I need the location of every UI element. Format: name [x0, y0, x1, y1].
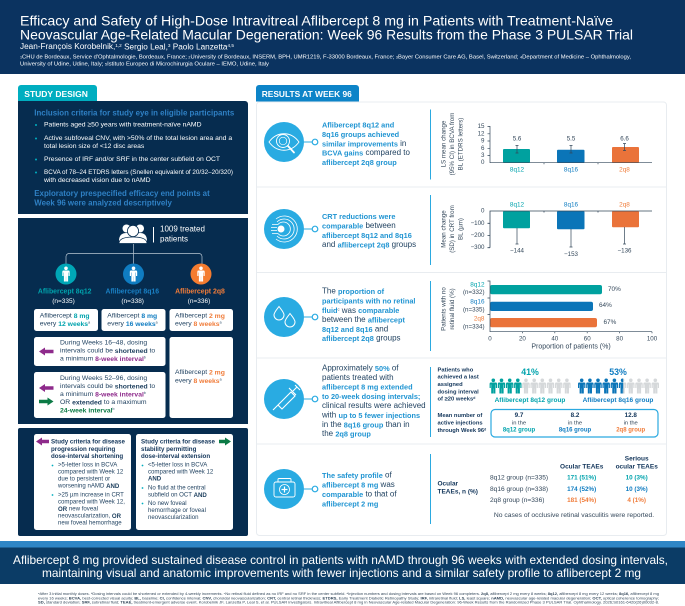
arrow: extend: [39, 398, 54, 406]
label: patients achieving interval: of ≥20 weeks: [438, 397, 473, 403]
table: ocular TEAEs: 171 (51%): [567, 474, 596, 482]
bar chart: BCVA change: 5.5: [567, 136, 576, 142]
table: ocular TEAEs: Serious: [625, 456, 649, 462]
inclusion heading: Inclusion criteria for study eye in eligible participants: [34, 108, 235, 118]
arm: aflibercept 2q8: Aflibercept 2q8: [175, 288, 225, 296]
table: ocular TEAEs: No cases of occlusive retinal vasculitis were reported.: [494, 512, 654, 519]
text: dosing finding: patients treated with: [322, 373, 394, 382]
result row: CRT: [264, 202, 652, 258]
bar chart: CRT change: 8q12: [510, 202, 525, 208]
panel: results: [256, 102, 666, 536]
bar chart: no retinal fluid: (n=335): [463, 306, 484, 314]
arm: aflibercept 8q16: Aflibercept 8q16: [105, 288, 159, 296]
patient count: patients: [160, 234, 188, 244]
table: ocular TEAEs: [490, 456, 658, 519]
arm: aflibercept 2q8: (n=336): [188, 298, 210, 305]
box: weeks 52-96 shortening or extension: During Weeks 52–96, dosing: [60, 375, 147, 382]
dosing box: 2q8: Aflibercept 2 mg: [175, 312, 225, 320]
text: BCVA finding: BCVA gains compared to: [322, 148, 410, 157]
criteria box: extension: <5-letter loss in BCVA: [148, 462, 208, 468]
criteria box: extension: stability permitting: [141, 446, 197, 453]
table: ocular TEAEs: 8q12 group (n=335): [490, 474, 548, 482]
dosing box: 2q8: [170, 309, 233, 331]
label: mean injections: d: [484, 428, 486, 432]
bar chart: BCVA change: 6: [481, 145, 485, 152]
box: 2q8 continued dosing: a: [220, 378, 222, 382]
text: safety finding: comparable to that of: [322, 490, 397, 498]
box: weeks 16-48 shortening: [34, 337, 166, 366]
text: safety finding: The safety profile of: [322, 470, 392, 480]
box: weeks 16-48 shortening: a minimum 8-week interval: [60, 356, 144, 362]
box: weeks 52-96 shortening or extension: a minimum 8-week interval: [60, 391, 144, 398]
arm: aflibercept 2q8: [175, 264, 225, 305]
title: Efficacy and Safety of High-Dose Intravitreal Aflibercept 8 mg in Patients with Treatment-Naïve: [20, 12, 613, 28]
bar chart: BCVA change: 8q12: [510, 166, 525, 174]
footnotes: [38, 592, 659, 605]
criteria box: shortening: dose-interval shortening: [51, 453, 123, 460]
criteria box: extension: AND: [148, 476, 162, 482]
text: fluid finding: The proportion of: [322, 286, 385, 296]
icon: syringe: [264, 379, 318, 419]
bar chart: no retinal fluid: 40: [551, 336, 559, 342]
text: dosing finding: to 20-week dosing intervals;: [322, 392, 420, 400]
text: CRT finding: aflibercept 8q12 and 8q16: [322, 230, 412, 240]
dosing box: 2q8: every 8 weeks: [175, 320, 220, 328]
criteria box: shortening: >25 µm increase in CRT: [58, 492, 124, 498]
row dividers: [430, 110, 432, 524]
conclusion banner: [0, 541, 685, 584]
tab: results at week 96: [256, 85, 359, 102]
bar chart: CRT change: −153: [564, 251, 579, 258]
bar chart: BCVA change: 2q8: [619, 166, 630, 174]
arrow: extension: [219, 438, 231, 446]
bar chart: no retinal fluid: (n=334): [463, 324, 484, 330]
dosing box: 8q16: every 16 weeks: [107, 320, 156, 328]
icon: retina cross-section: [264, 209, 318, 249]
pictogram: 8q12 41 percent: [490, 367, 571, 404]
bar chart: CRT change: −100: [471, 220, 485, 227]
pictogram: 8q16 53 percent: 53%: [609, 367, 627, 377]
affiliations: 1CHU de Bordeaux, Service d'Ophtalmologie, Bordeaux, France; 2University of Bordeaux, INSERM, BPH, UMR1219, F-33000 Bordeaux, France; 3Bayer Consumer Care AG, Basel, Switzerland; 4Department of Medicine – Ophthalmology,: [20, 54, 631, 60]
tab: study design: [18, 85, 97, 101]
icon: fluid drops: [264, 297, 318, 337]
conclusion banner: maintaining visual and anatomic improvements with fewer injections and a similar safety profile to aflibercept 2 mg: [42, 566, 641, 580]
bar chart: BCVA change: 8q16: [564, 166, 579, 174]
bar chart: no retinal fluid: 80: [616, 336, 624, 342]
bar chart: no retinal fluid: 20: [519, 336, 526, 342]
criteria box: extension: Study criteria for disease: [141, 438, 215, 446]
box: weeks 16-48 shortening: b: [144, 356, 146, 360]
table: ocular TEAEs: 174 (52%): [567, 486, 596, 493]
panel: study criteria: [18, 428, 248, 536]
box: weeks 52-96 shortening or extension: b: [144, 391, 146, 395]
bar chart: no retinal fluid: 60: [584, 336, 591, 342]
text: fluid finding: comparable: [358, 306, 399, 314]
inclusion bullet list: [35, 122, 233, 184]
criteria box: shortening: >5-letter loss in BCVA: [58, 462, 118, 468]
authors: Sergio Leal,: [122, 42, 168, 51]
table: ocular TEAEs: 8q16 group (n=338): [490, 486, 548, 493]
arm: aflibercept 8q12: (n=335): [52, 298, 75, 305]
title: Neovascular Age-Related Macular Degeneration: Week 96 Results from the Phase 3 PULSAR Trial: [20, 26, 633, 42]
text: BCVA finding: similar improvements in: [322, 139, 406, 148]
bar chart: CRT change: (SD) in CRT from: [449, 205, 456, 253]
dosing box: 8q12: every 12 weeks: [40, 320, 88, 328]
text: dosing finding: the 2q8 group: [322, 429, 371, 438]
icon: eye with magnifier: [264, 122, 318, 162]
arm: aflibercept 8q12: Aflibercept 8q12: [38, 288, 92, 296]
criteria box: extension: compared with Week 12: [148, 468, 214, 476]
table: ocular TEAEs: 181 (54%): [567, 497, 596, 504]
label: mean injections: active injections: [438, 420, 483, 426]
bar chart: CRT change: BL (µm): [458, 218, 464, 240]
criteria box: extension: No new foveal: [148, 500, 187, 507]
text: fluid finding: [322, 286, 415, 342]
box: weeks 52-96 shortening or extension: [34, 372, 166, 418]
arm: aflibercept 8q12: [38, 264, 92, 305]
label: ocular TEAEs: TEAEs, n (%): [438, 488, 478, 496]
label: patients achieving interval: achieved a last: [438, 375, 479, 381]
criteria box: extension: No fluid at the central: [148, 484, 206, 492]
exploratory end points note: [34, 189, 210, 208]
bar chart: no retinal fluid: 8q16: [470, 298, 485, 306]
icon: first-aid kit: [264, 469, 318, 509]
bar chart: no retinal fluid: (n=332): [463, 289, 484, 296]
text: fluid finding: 8q12 and 8q16 and: [322, 324, 388, 334]
dosing box: 8q12: [34, 309, 98, 331]
bar chart: no retinal fluid: [440, 281, 658, 350]
box: weeks 16-48 shortening: intervals could be shortened to: [60, 348, 155, 354]
pictogram: 8q16 53 percent: Aflibercept 8q16 group: [583, 397, 653, 404]
label: patients achieving interval: assigned: [438, 382, 463, 388]
affiliations: University of Udine, Udine, Italy; 5Istituto Europeo di Microchirurgia Oculare – IEMO, Udine, Italy: [20, 62, 269, 68]
exploratory end points note: Exploratory prespecified efficacy end points at: [34, 189, 210, 198]
bar chart: BCVA change: 12: [478, 130, 485, 137]
bar chart: no retinal fluid: Proportion of patients (%): [531, 344, 611, 350]
arrow: shorten: [39, 384, 54, 392]
bar chart: CRT change: −200: [471, 232, 485, 239]
label: patients achieving interval: [438, 367, 479, 403]
bar chart: CRT change: −136: [618, 248, 632, 254]
authors: Paolo Lanzetta: [170, 42, 228, 51]
label: patients achieving interval: d: [473, 396, 475, 400]
result row: BCVA: [264, 113, 652, 175]
dosing box: 2q8: a: [220, 320, 222, 324]
bar chart: BCVA change: 0: [481, 159, 485, 166]
criteria box: extension: dose-interval extension: [141, 453, 210, 460]
title: [20, 12, 633, 42]
criteria box: shortening: new foveal hemorrhage: [58, 520, 122, 526]
bar chart: no retinal fluid: 67%: [604, 319, 617, 326]
text: fluid finding: between the aflibercept: [322, 315, 406, 324]
bar chart: BCVA change: [440, 113, 652, 175]
bar chart: BCVA change: 9: [481, 138, 485, 144]
table: ocular TEAEs: 10 (3%): [626, 486, 648, 493]
criteria box: shortening: [34, 434, 131, 530]
criteria box: shortening: due to persistent or: [58, 476, 110, 482]
label: patients achieving interval: dosing interval: [438, 389, 479, 395]
label: patients achieving interval: Patients who: [438, 367, 474, 373]
callout: mean injections box: in the: [568, 420, 582, 426]
text: fluid finding: c: [338, 306, 340, 311]
bar chart: CRT change: 8q16: [564, 202, 579, 208]
arm: aflibercept 8q16: [105, 264, 159, 305]
icon: patients group: [119, 224, 147, 244]
text: BCVA finding: Aflibercept 8q12 and: [322, 120, 394, 129]
criteria box: extension: hemorrhage or foveal: [148, 507, 206, 514]
dosing box: 8q16: Aflibercept 8 mg: [107, 312, 157, 320]
callout: mean injections box: 8.2: [571, 412, 580, 419]
text: fluid finding: fluid: [322, 306, 338, 314]
bar chart: CRT change: 2q8: [619, 202, 630, 208]
exploratory end points note: Week 96 were analyzed descriptively: [34, 198, 172, 208]
authors: 4,5: [227, 42, 235, 48]
callout: mean injections box: in the: [512, 420, 526, 426]
box: weeks 16-48 shortening: During Weeks 16–48, dosing: [60, 340, 147, 346]
inclusion bullet list: Patients aged ≥50 years with treatment-naïve nAMD: [44, 122, 202, 128]
pictogram: 8q12 41 percent: Aflibercept 8q12 group: [495, 397, 565, 404]
bar chart: CRT change: [440, 202, 652, 258]
bar chart: CRT change: −300: [471, 244, 485, 251]
label: ocular TEAEs: [438, 480, 478, 496]
inclusion bullet list: Active subfoveal CNV, with >50% of the total lesion area and a: [44, 135, 232, 142]
dosing box: 8q16: a: [156, 320, 158, 324]
inclusion bullet list: with decreased vision due to nAMD: [43, 177, 151, 184]
pictogram: 8q12 41 percent: 41%: [521, 367, 539, 377]
text: dosing finding: clinical results were achieved: [322, 401, 426, 410]
label: mean injections: [438, 413, 486, 434]
table: ocular TEAEs: 10 (3%): [626, 474, 648, 482]
bar chart: no retinal fluid: 70%: [608, 286, 621, 293]
text: CRT finding: comparable between: [322, 221, 396, 230]
criteria box: shortening: neovascularization, OR: [58, 512, 122, 520]
text: fluid finding: was: [340, 306, 358, 314]
result row: dosing intervals: [264, 364, 659, 438]
box: weeks 52-96 shortening or extension: OR extended to a maximum: [60, 399, 147, 406]
result row: retinal fluid: [264, 281, 658, 350]
affiliations: [20, 54, 631, 68]
bar chart: no retinal fluid: 2q8: [474, 316, 485, 322]
text: dosing finding: [321, 364, 426, 438]
box: weeks 52-96 shortening or extension: intervals could be shortened to: [60, 383, 155, 390]
callout: mean injections box: 9.7: [515, 412, 524, 419]
inclusion bullet list: BCVA of 78–24 ETDRS letters (Snellen equivalent of 20/32–20/320): [44, 169, 233, 176]
box: weeks 52-96 shortening or extension: b: [113, 407, 115, 411]
text: safety finding: aflibercept 2 mg: [322, 499, 378, 508]
bar chart: no retinal fluid: 0: [488, 336, 492, 342]
bar chart: CRT change: Mean change: [440, 210, 448, 248]
callout: mean injections box: 2q8 group: [616, 427, 646, 433]
text: BCVA finding: 8q16 groups achieved: [322, 130, 399, 138]
footnotes: SD, standard deviation; SRF, subretinal fluid; TEAE, treatment-emergent adverse event. Korobelnik JF, Lanzetta P, Leal S, et al. PULSAR investigators. Intravitreal Aflibercept 8 mg in Neovascular Age-related Macular Degeneration: 96-Week Results from the Randomized Phase 3 PULSAR Trial. Ophthalmology. 2026;S0161-6420(26)00032-8.: [38, 601, 659, 605]
patient count: [160, 224, 205, 244]
footnotes: ᵃAfter 3 initial monthly doses. ᵇDosing intervals could be shortened or extended by 4-weekly increments. ᶜNo retinal fluid defined as no IRF and no SRF in the center subfield. ᵈInjection numbers and dosing intervals are based on Week 96 completers. 2q8, aflibercept 2 mg every 8 weeks; 8q12, aflibercept 8 mg every 12 weeks; 8q16, aflibercept 8 mg: [38, 592, 659, 596]
bar chart: BCVA change: 15: [478, 123, 485, 130]
callout: mean injections box: in the: [624, 420, 638, 426]
text: dosing finding: with up to 5 fewer injections: [321, 410, 420, 420]
criteria box: shortening: OR new foveal: [58, 506, 98, 512]
text: CRT finding: and aflibercept 2q8 groups: [322, 240, 416, 249]
text: dosing finding: aflibercept 8 mg extended: [322, 382, 413, 391]
box: 2q8 continued dosing: [170, 337, 233, 418]
callout: mean injections box: 8q12 group: [503, 427, 536, 433]
criteria box: shortening: worsening nAMD AND: [57, 482, 120, 490]
bar chart: BCVA change: 5.6: [513, 136, 522, 142]
bar chart: no retinal fluid: retinal fluid (%): [449, 288, 456, 330]
dosing box: 8q12: a: [88, 320, 90, 324]
bar chart: BCVA change: (95% CI) in BCVA from: [449, 113, 456, 175]
criteria box: extension: neovascularization: [148, 514, 198, 521]
bar chart: no retinal fluid: 100: [647, 336, 658, 342]
callout: mean injections box: [491, 410, 658, 437]
tab: results at week 96: RESULTS AT WEEK 96: [262, 89, 352, 99]
authors: 3: [168, 42, 171, 48]
randomization tree: [66, 244, 202, 264]
table: ocular TEAEs: Ocular TEAEs: [560, 464, 604, 470]
box: 2q8 continued dosing: every 8 weeks: [175, 378, 220, 384]
label: mean injections: through Week 96: [438, 428, 484, 434]
callout: mean injections box: 8q16 group: [559, 427, 592, 433]
result row: safety: [264, 456, 658, 519]
pictogram: 8q16 53 percent: [578, 367, 659, 404]
text: fluid finding: aflibercept 2q8 groups: [322, 334, 401, 342]
text: CRT finding: CRT reductions were: [322, 212, 395, 220]
callout: mean injections box: 12.8: [625, 412, 637, 419]
label: mean injections: Mean number of: [438, 413, 482, 419]
text: safety finding: [322, 470, 397, 508]
table: ocular TEAEs: 2q8 group (n=336): [490, 497, 544, 504]
bar chart: CRT change: 0: [481, 208, 485, 214]
criteria box: shortening: compared with Week 12,: [58, 498, 125, 506]
text: BCVA finding: aflibercept 2q8 group: [322, 158, 397, 166]
header banner: [0, 0, 685, 74]
footnotes: every 16 weeks; BCVA, best-corrected visual acuity; BL, baseline; CI, confidence interval; CNV, choroidal neovascularization; CRT, central retinal thickness; ETDRS, Early Treatment Diabetic Retinopathy Study; IRF, intraretinal fluid; LS, least square; nAMD, neovascular age-related macular degeneration; OCT, optical coherence tomography;: [38, 596, 659, 600]
inclusion bullet list: Presence of IRF and/or SRF in the center subfield on OCT: [44, 156, 220, 163]
criteria box: shortening: progression requiring: [51, 446, 116, 453]
text: safety finding: aflibercept 8 mg was: [322, 480, 395, 489]
box: weeks 52-96 shortening or extension: 24-week interval: [60, 407, 113, 414]
text: fluid finding: participants with no retinal: [322, 296, 415, 305]
inclusion bullet list: total lesion size of <12 disc areas: [44, 143, 145, 150]
dosing box: 8q16: [102, 309, 166, 331]
bar chart: BCVA change: LS mean change: [440, 120, 448, 167]
text: dosing finding: Approximately 50% of: [322, 364, 399, 372]
patient count: 1009 treated: [160, 224, 205, 234]
criteria box: extension: [136, 434, 233, 530]
bar chart: no retinal fluid: 8q12: [470, 282, 485, 288]
bar chart: no retinal fluid: 64%: [599, 302, 612, 309]
arrow: shorten: [39, 348, 54, 356]
bar chart: BCVA change: 3: [481, 152, 485, 159]
box: 2q8 continued dosing: Aflibercept 2 mg: [175, 369, 225, 376]
authors: 1,2: [115, 42, 122, 48]
panel: inclusion criteria: [18, 101, 248, 214]
bar chart: BCVA change: BL (ETDRS letters): [458, 118, 464, 170]
conclusion banner: Aflibercept 8 mg provided sustained disease control in patients with nAMD through 96 weeks with extended dosing intervals,: [13, 553, 668, 567]
text: CRT finding: [322, 212, 416, 249]
criteria box: extension: subfield on OCT AND: [148, 492, 207, 498]
text: BCVA finding: [322, 120, 410, 166]
arrow: shortening: [36, 438, 49, 446]
label: ocular TEAEs: Ocular: [438, 480, 459, 488]
criteria box: shortening: compared with Week 12: [58, 468, 124, 476]
bar chart: BCVA change: 6.6: [620, 136, 629, 142]
text: dosing finding: in the 8q16 group than in: [322, 420, 410, 429]
table: ocular TEAEs: ocular TEAEs: [616, 464, 658, 470]
bar chart: no retinal fluid: Patients with no: [440, 287, 448, 331]
tab: study design: STUDY DESIGN: [24, 89, 88, 99]
bar chart: CRT change: −144: [510, 248, 525, 254]
authors: Jean-François Korobelnik,: [20, 42, 112, 51]
criteria box: shortening: Study criteria for disease: [51, 438, 125, 446]
arm: aflibercept 8q16: (n=338): [121, 298, 144, 305]
dosing box: 8q12: Aflibercept 8 mg: [40, 312, 90, 320]
panel: treatment arms: [18, 218, 248, 424]
table: ocular TEAEs: 4 (1%): [627, 497, 646, 504]
